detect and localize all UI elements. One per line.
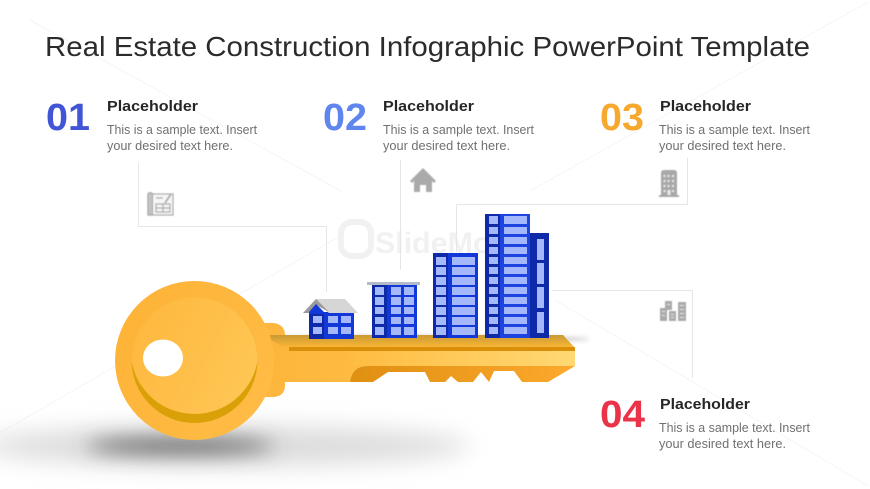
block 02: [323, 97, 535, 153]
key teeth: [350, 366, 575, 382]
shaft highlight: [350, 351, 575, 366]
building 4: [485, 214, 530, 338]
building 2: [367, 282, 420, 338]
watermark: SlideMod: [375, 227, 510, 260]
shaft shadow: [250, 336, 590, 342]
key bow: [115, 281, 274, 440]
block 04: 04: [600, 394, 645, 436]
block 03: your desired text here.: [659, 139, 786, 153]
key collar: [250, 323, 285, 397]
shaft top bevel: [262, 335, 575, 348]
block 04: your desired text here.: [659, 437, 786, 451]
block 03: Placeholder: [660, 98, 751, 115]
building 5: [530, 233, 549, 338]
block 03: This is a sample text. Insert: [659, 123, 811, 137]
block 02: your desired text here.: [383, 139, 510, 153]
icon: blueprint: [148, 193, 173, 215]
block 04: [600, 394, 811, 451]
block 02: Placeholder: [383, 98, 474, 115]
golden key: [115, 281, 575, 440]
block 01: [46, 97, 258, 153]
connector lines: [138, 158, 692, 378]
icon: city buildings: [660, 301, 686, 321]
block 01: 01: [46, 97, 90, 139]
building 3: [433, 253, 478, 338]
block 01: Placeholder: [107, 98, 198, 115]
block 01: your desired text here.: [107, 139, 233, 153]
block 04: Placeholder: [660, 396, 750, 413]
block 04: This is a sample text. Insert: [659, 421, 811, 435]
icon: office tower: [659, 170, 679, 197]
key shaft: [270, 335, 575, 382]
block 03: [600, 97, 811, 153]
block 02: This is a sample text. Insert: [383, 123, 535, 137]
block 01: This is a sample text. Insert: [107, 123, 258, 137]
block 02: 02: [323, 97, 367, 139]
key ground shadow: [0, 426, 470, 466]
title: Real Estate Construction Infographic PowerPoint Template: [45, 31, 810, 62]
bow inner face: [132, 297, 258, 423]
house on key: [303, 299, 358, 339]
watermark: [341, 222, 510, 260]
icon: house: [410, 168, 436, 192]
key hole: [143, 340, 183, 376]
block 03: 03: [600, 97, 644, 139]
